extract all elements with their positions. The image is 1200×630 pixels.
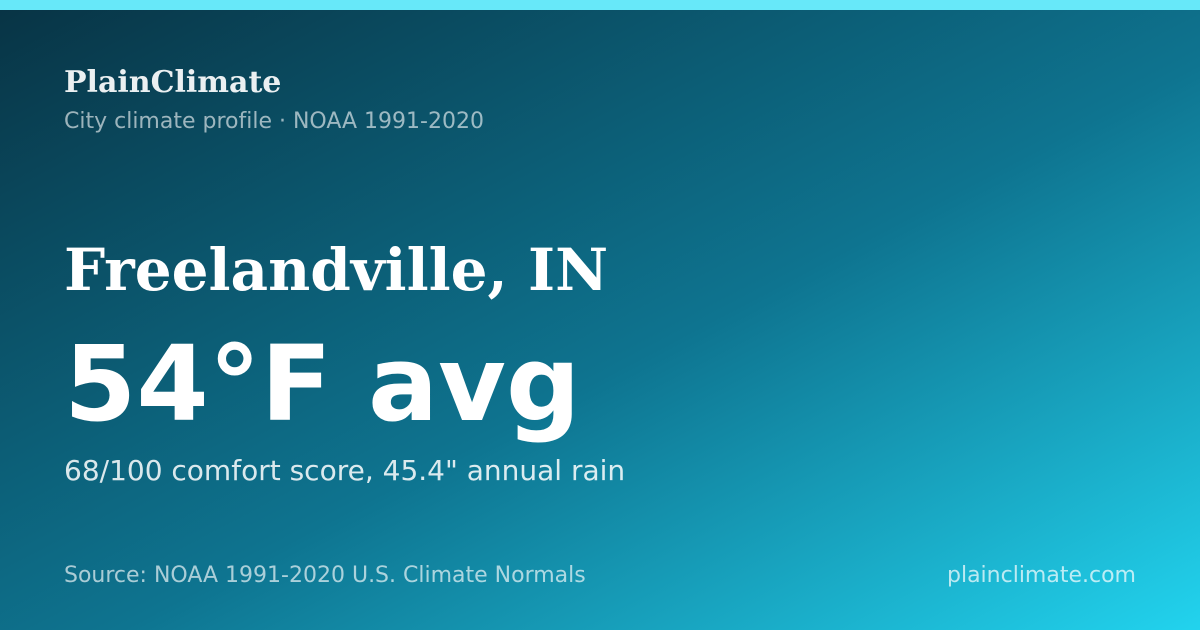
temperature headline: 54°F avg [64,323,580,445]
city heading: Freelandville, IN [64,236,608,304]
subtitle: City climate profile · NOAA 1991-2020 [64,109,484,134]
site url: plainclimate.com [947,563,1136,588]
source note: Source: NOAA 1991-2020 U.S. Climate Normals [64,563,586,588]
brand name: PlainClimate [64,65,281,100]
top accent bar [0,0,1200,10]
comfort and rain summary: 68/100 comfort score, 45.4" annual rain [64,454,625,487]
